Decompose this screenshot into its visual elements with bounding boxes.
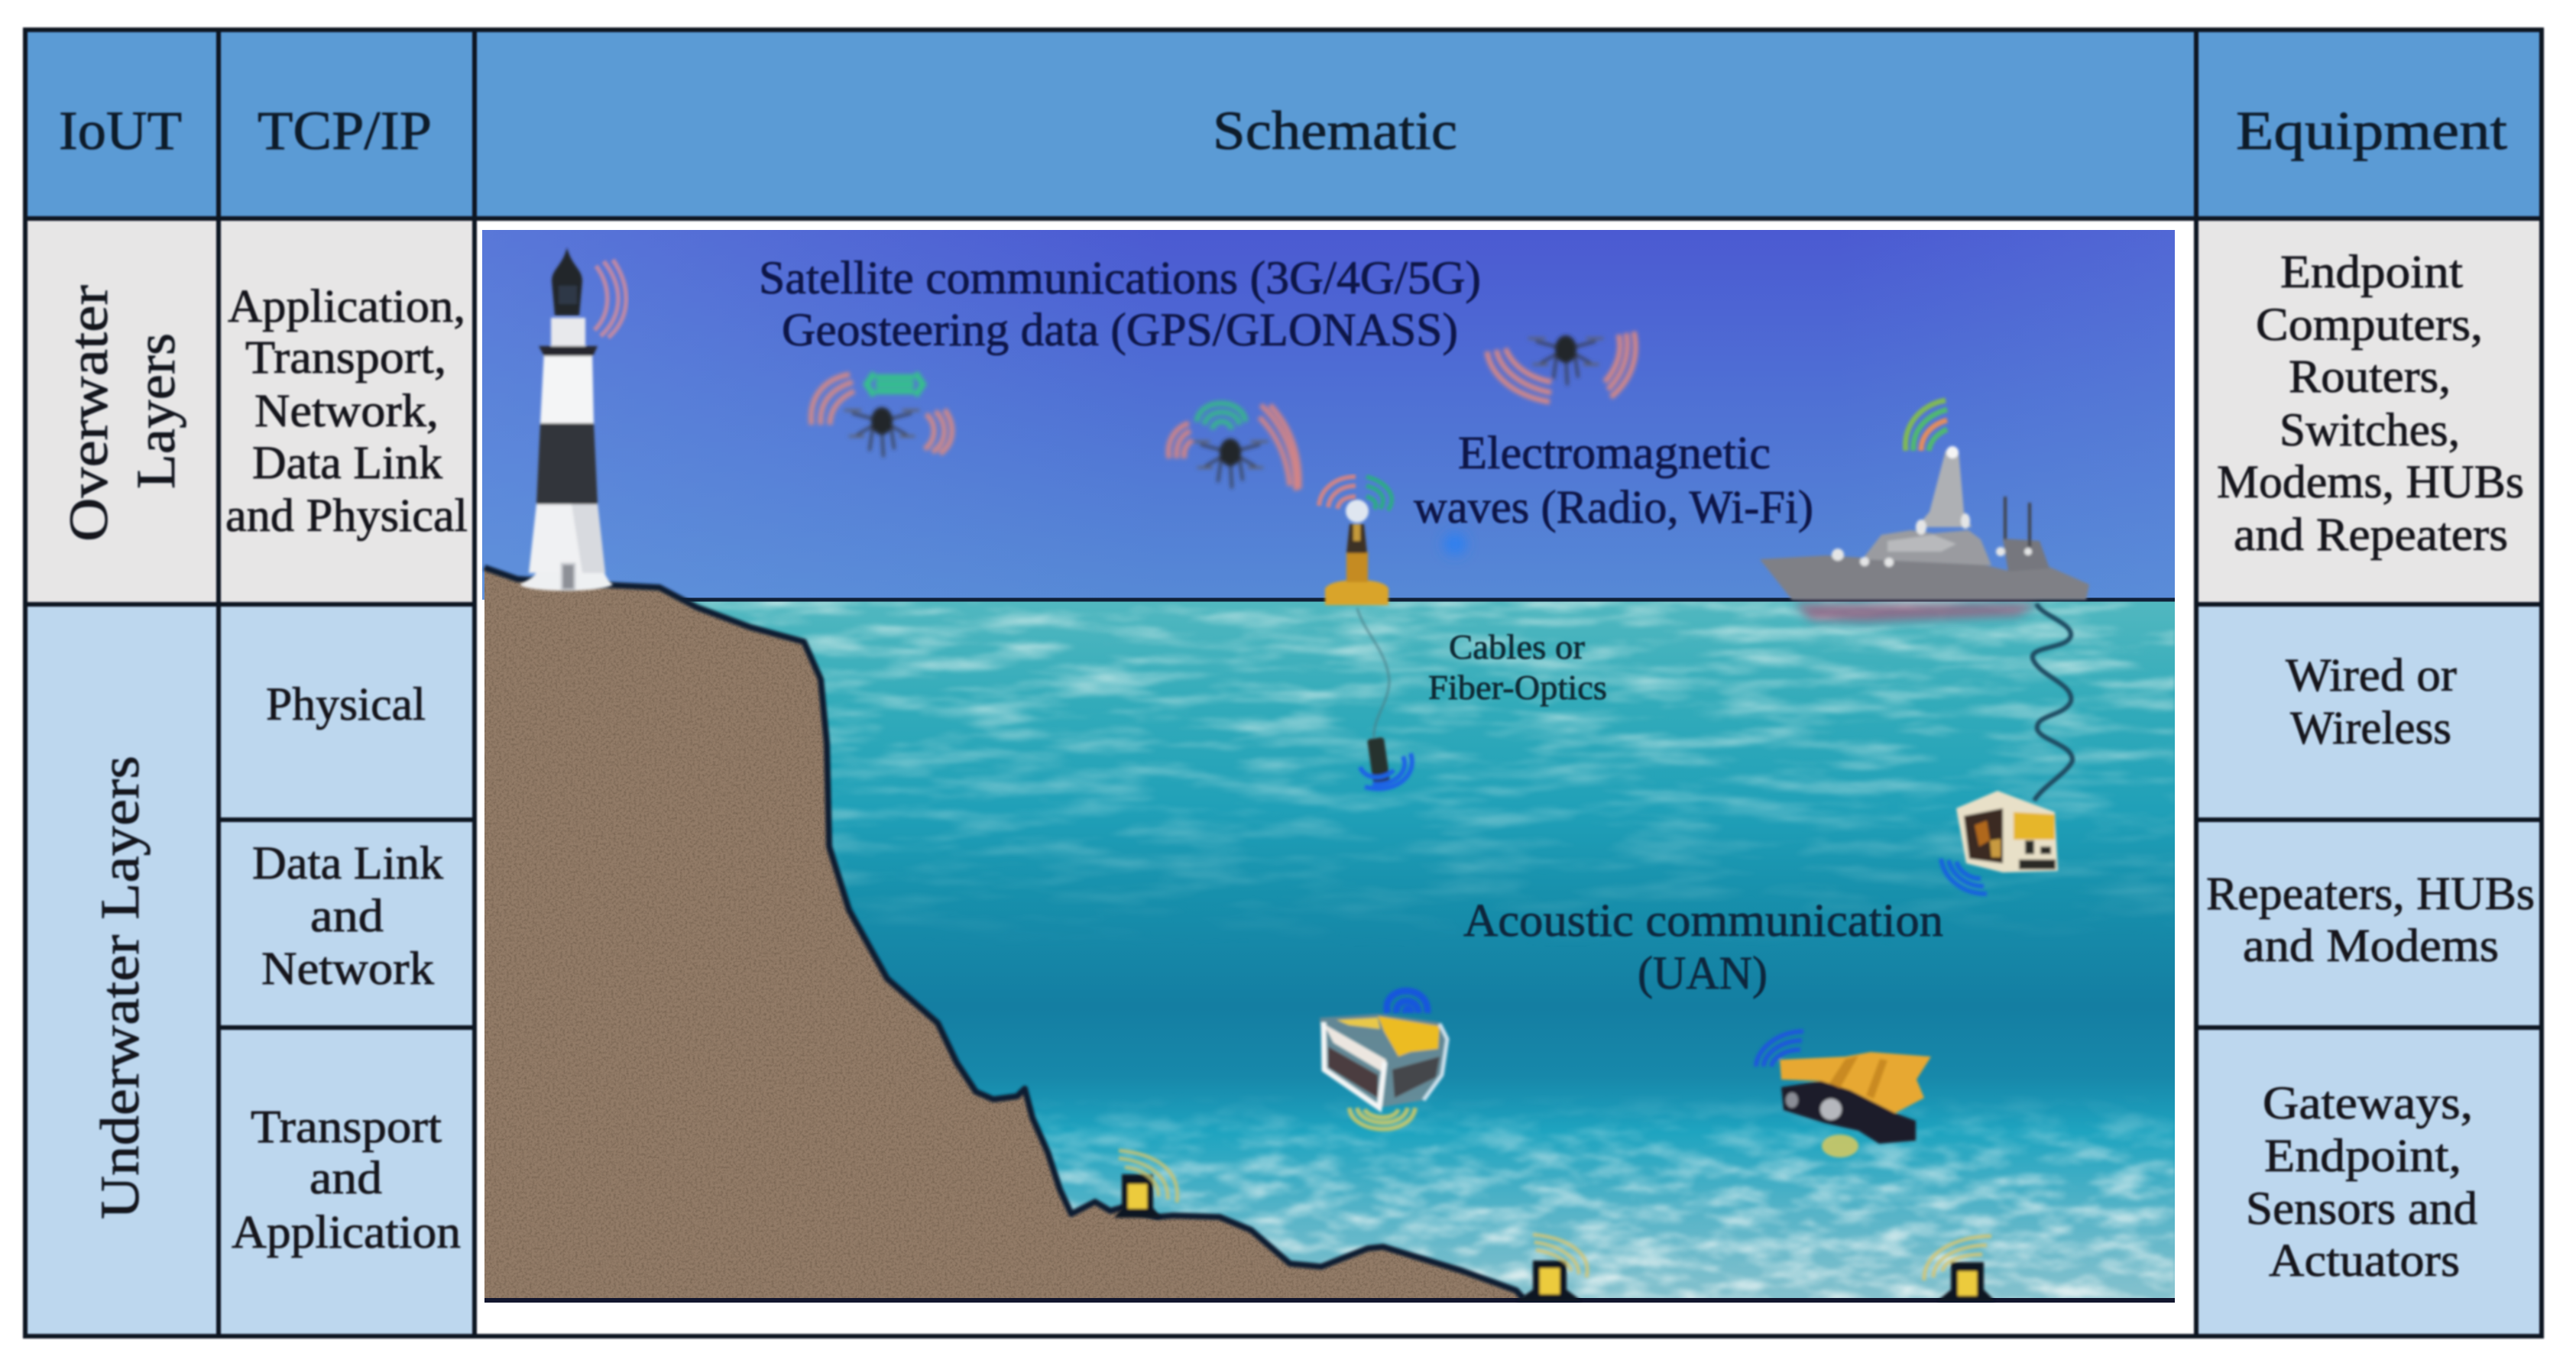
signal: sensor blue arcs (1360, 753, 1412, 788)
signal: ship arcs (1906, 400, 1947, 451)
text: TCP/IP transport and application (232, 1102, 461, 1258)
text: equipment repeaters hubs modems: Repeaters, HUBs (2206, 869, 2535, 920)
text: equipment wired or wireless: Wired or (2286, 650, 2457, 701)
signal: sensor 2 arcs (1533, 1235, 1587, 1277)
icon: seabed sensor 2 (1516, 1235, 1587, 1301)
text: equipment wired or wireless: Wireless (2290, 703, 2451, 754)
label: underwater layers: Underwater Layers (89, 756, 151, 1219)
text: equipment overwater: and Repeaters (2234, 510, 2508, 561)
header: Equipment: Equipment (2236, 100, 2507, 161)
icon: seabed sensor 3 (1924, 1236, 1995, 1301)
icon: yellow ROV (1756, 1031, 1931, 1157)
seabed and cliff (484, 568, 2175, 1300)
signal: white ROV yellow arcs (1350, 1108, 1415, 1129)
label: satellite communications: Geosteering data (GPS/GLONASS) (782, 305, 1458, 356)
text: TCP/IP physical: Physical (266, 679, 426, 730)
label: acoustic communication: (UAN) (1638, 948, 1768, 999)
text: equipment repeaters hubs modems: and Modems (2243, 921, 2499, 972)
icon: white frame ROV (1320, 991, 1447, 1129)
signal: sensor 1 arcs (1119, 1151, 1178, 1203)
label: satellite communications (759, 253, 1481, 356)
label: electromagnetic waves: waves (Radio, Wi-Fi) (1414, 482, 1813, 533)
text: TCP/IP transport and application: and (309, 1153, 382, 1204)
horizon line (657, 597, 2175, 602)
text: TCP/IP overwater layers: Transport, (245, 332, 446, 384)
icon: tethered ROV (1941, 791, 2058, 894)
icon: drone centre (1168, 403, 1299, 490)
icon: seabed sensor 1 (1114, 1151, 1178, 1218)
signal: yellow ROV blue arcs (1756, 1031, 1803, 1067)
label: overwater layers: Overwater (58, 285, 119, 542)
text: equipment gateways endpoint sensors actuators: Actuators (2269, 1235, 2460, 1287)
label: acoustic communication (1463, 895, 1943, 999)
text: equipment overwater (2217, 247, 2524, 561)
text: TCP/IP overwater layers: and Physical (225, 490, 468, 542)
signal: drone right arcs (1487, 332, 1635, 402)
signal: drone centre arcs (1168, 403, 1299, 490)
signal: white ROV blue arcs (1387, 991, 1427, 1013)
icon: lighthouse (520, 248, 613, 591)
label: satellite communications: Satellite communications (3G/4G/5G) (759, 253, 1481, 304)
sky (482, 230, 2175, 600)
text: equipment gateways endpoint sensors actuators: Endpoint, (2264, 1131, 2461, 1182)
label: electromagnetic waves (1414, 428, 1813, 533)
icon: drone left (811, 373, 952, 456)
text: equipment repeaters hubs modems (2206, 869, 2535, 972)
label: cables or fiber-optics: Cables or (1449, 627, 1585, 666)
label: cables or fiber-optics: Fiber-Optics (1428, 668, 1607, 707)
text: TCP/IP overwater layers (225, 281, 468, 542)
text: TCP/IP overwater layers: Application, (228, 281, 465, 332)
text: equipment gateways endpoint sensors actuators: Gateways, (2263, 1078, 2473, 1129)
scene: schematic illustration (482, 230, 2175, 1301)
panel: underwater cell backgrounds (25, 604, 2542, 1336)
label: overwater layers: Layers (125, 333, 186, 489)
signal: buoy arcs (1319, 477, 1392, 510)
text: TCP/IP data link and network: and (310, 891, 384, 942)
text: equipment gateways endpoint sensors actuators (2246, 1078, 2477, 1287)
label: cables or fiber-optics (1428, 627, 1607, 707)
water (689, 602, 2175, 1298)
header: TCP/IP: TCP/IP (258, 100, 432, 161)
icon: blue signal spot (1444, 532, 1466, 555)
text: equipment overwater: Endpoint (2280, 247, 2463, 298)
signal: yellow ROV yellow arcs (1822, 1135, 1858, 1157)
text: equipment overwater: Routers, (2289, 351, 2451, 403)
text: TCP/IP overwater layers: Network, (254, 386, 439, 437)
label: acoustic communication: Acoustic communication (1463, 895, 1943, 947)
text: TCP/IP data link and network (252, 838, 444, 995)
signal: tethered ROV arcs (1941, 859, 1987, 894)
text: TCP/IP transport and application: Application (232, 1207, 461, 1258)
icon: lighthouse signal arcs (595, 260, 626, 338)
text: TCP/IP transport and application: Transport (251, 1102, 442, 1153)
ship reflection (1794, 604, 2040, 622)
text: equipment overwater: Computers, (2256, 299, 2483, 351)
signal: sensor 3 arcs (1924, 1236, 1991, 1280)
text: TCP/IP data link and network: Data Link (252, 838, 444, 889)
icon: drone right (1487, 332, 1635, 402)
text: equipment overwater: Modems, HUBs (2217, 457, 2524, 508)
text: TCP/IP overwater layers: Data Link (252, 438, 443, 489)
text: equipment gateways endpoint sensors actuators: Sensors and (2246, 1183, 2477, 1235)
text: TCP/IP data link and network: Network (261, 944, 435, 995)
icon: ship (1760, 446, 2089, 622)
label: electromagnetic waves: Electromagnetic (1458, 428, 1771, 479)
header: Schematic: Schematic (1213, 100, 1457, 161)
label: overwater layers (58, 285, 186, 542)
icon: underwater sensor and cable (1357, 608, 1412, 788)
text: equipment overwater: Switches, (2280, 405, 2460, 456)
cable: ship to ROV (2033, 604, 2072, 801)
header row (25, 30, 2542, 218)
header: IoUT: IoUT (59, 100, 182, 161)
text: equipment wired or wireless (2286, 650, 2457, 754)
signal: drone left arcs (811, 373, 952, 454)
panel: overwater cell backgrounds (25, 218, 2542, 604)
icon: buoy (1325, 500, 1388, 605)
